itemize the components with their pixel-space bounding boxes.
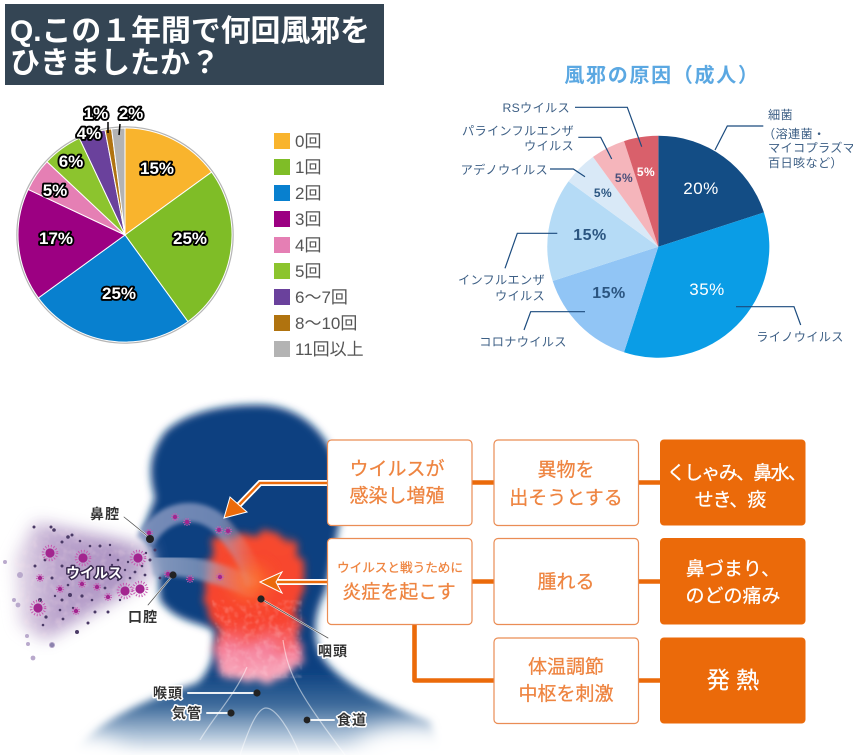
cause labels [458,101,853,349]
slice: 3回 17% [18,189,125,298]
slice: 4回 5% [28,162,125,235]
leader lines and dots [124,517,334,723]
pie percentage labels: 4% [77,124,101,143]
causes pie percentages: 15% [592,285,626,302]
cause labels: アデノウイルス [461,162,548,177]
slice: adenovirus 5% [568,157,658,247]
pie percentage labels: 5% [43,181,67,200]
causes pie percentages [573,165,725,302]
pie chart: number of colds per year [17,127,233,343]
legend: number of colds: 8〜10回 [295,314,357,333]
slice: RS virus 5% [624,136,658,247]
head and shoulders silhouette [25,405,475,755]
leader lines for causes pie [505,107,801,330]
title banner [5,4,384,85]
legend: number of colds: 3回 [295,210,321,229]
pie chart: causes of colds in adults [547,136,769,358]
pie percentage labels: 17% [39,229,73,248]
cause labels: 百日咳など） [768,156,843,170]
box: stuffy nose, sore throat [660,538,806,624]
box: cause inflammation to fight virus: ウイルスと戦うために [337,561,463,575]
large virus particles [31,514,231,615]
box: stuffy nose, sore throat: 鼻づまり、 [686,558,780,580]
legend: number of colds [274,132,364,359]
slice: influenza 15% [547,181,658,281]
airway tubes [145,512,258,590]
box: virus infects and multiplies: 感染し増殖 [349,485,445,507]
arrow: to throat [260,572,327,593]
anatomy labels: 気管 [172,705,202,721]
slice: 11回以上 2% [112,128,125,235]
slice: 8〜10回 1% [105,129,125,235]
cause labels: インフルエンザ [458,273,545,287]
pie percentage labels: 25% [102,284,136,303]
box: try to expel foreign matter: 異物を [537,459,595,481]
cause labels: ライノウイルス [756,330,844,344]
anatomy labels: 口腔 [128,609,158,625]
box: stimulate thermoregulatory center: 体温調節 [528,656,604,678]
legend: number of colds: 2回 [295,184,321,203]
slice: coronavirus 15% [553,247,658,352]
box: symptoms sneeze, runny nose, cough, phlegm [660,440,806,526]
slice: 0回 15% [125,128,212,235]
cause labels: パラインフルエンザ [462,124,574,138]
pie percentage labels: 25% [173,229,207,248]
box: swelling [494,538,638,624]
heading: causes of colds: 風邪の原因（成人） [564,63,760,87]
slice: 2回 25% [38,235,188,342]
causes pie percentages: 5% [637,165,655,179]
anatomy labels: ウイルス [66,565,122,581]
slice: rhinovirus 35% [624,212,769,358]
box: try to expel foreign matter: 出そうとする [509,487,623,509]
anatomy labels [66,506,367,728]
cause labels: マイコプラズマ [768,140,853,155]
box: stimulate thermoregulatory center [494,638,638,724]
anatomy labels: 咽頭 [318,643,348,659]
slice: bacteria 20% [658,136,764,247]
causes pie percentages: 5% [594,186,612,200]
pie percentage labels: 2% [119,104,143,123]
flow connectors [414,482,660,680]
title banner: Q.この１年間で何回風邪を [10,15,370,48]
causes pie percentages: 5% [615,171,633,185]
box: stimulate thermoregulatory center: 中枢を刺激 [518,683,614,705]
small virus particles [32,526,161,634]
cause labels: （溶連菌・ [763,127,825,141]
box: fever [660,638,806,724]
title banner: ひきましたか？ [10,47,220,80]
legend: number of colds: 11回以上 [295,340,364,359]
slice: 5回 6% [47,138,125,235]
anatomy labels: 鼻腔 [90,506,120,522]
trachea and esophagus outlines [200,640,345,755]
cause labels: RSウイルス [503,101,570,115]
box: cause inflammation to fight virus [328,538,472,624]
causes pie percentages: 20% [683,179,719,198]
illustration: head and neck with virus infection [3,405,475,755]
arrow: to nasal passage [224,483,327,518]
anatomy labels: 喉頭 [153,685,183,701]
pie percentage labels: 15% [140,159,174,178]
legend: number of colds: 4回 [295,236,321,255]
legend: number of colds: 5回 [295,262,321,281]
cause labels: ウイルス [524,139,574,153]
pie percentage labels: 1% [84,104,108,123]
legend: number of colds: 1回 [295,158,321,177]
box: virus infects and multiplies: ウイルスが [349,458,445,480]
causes pie percentages: 15% [573,227,607,244]
pie percentage labels: 6% [59,152,83,171]
box: cause inflammation to fight virus: 炎症を起こす [342,581,456,603]
cause labels: 細菌 [768,107,793,122]
faded particles [3,560,55,660]
slice: parainfluenza 5% [593,141,658,247]
box: swelling: 腫れる [537,571,595,593]
box: fever: 発 熱 [707,667,759,693]
legend: number of colds: 0回 [295,132,321,151]
box: virus infects and multiplies [328,440,472,526]
inflamed throat tissue [204,530,304,680]
virus spray cloud [14,522,152,640]
cause labels: コロナウイルス [479,335,567,349]
box: symptoms sneeze, runny nose, cough, phlegm: せき、痰 [695,489,766,511]
box: symptoms sneeze, runny nose, cough, phlegm: くしゃみ、鼻水、 [667,462,805,484]
causes pie percentages: 35% [689,280,725,299]
pie percentage labels [39,104,207,303]
anatomy labels: 食道 [337,712,367,728]
slice: 1回 25% [125,172,232,322]
slice: 6〜7回 4% [79,130,125,235]
cause labels: ウイルス [495,289,545,303]
legend: number of colds: 6〜7回 [295,288,348,307]
box: stuffy nose, sore throat: のどの痛み [685,585,781,607]
box: try to expel foreign matter [494,440,638,526]
